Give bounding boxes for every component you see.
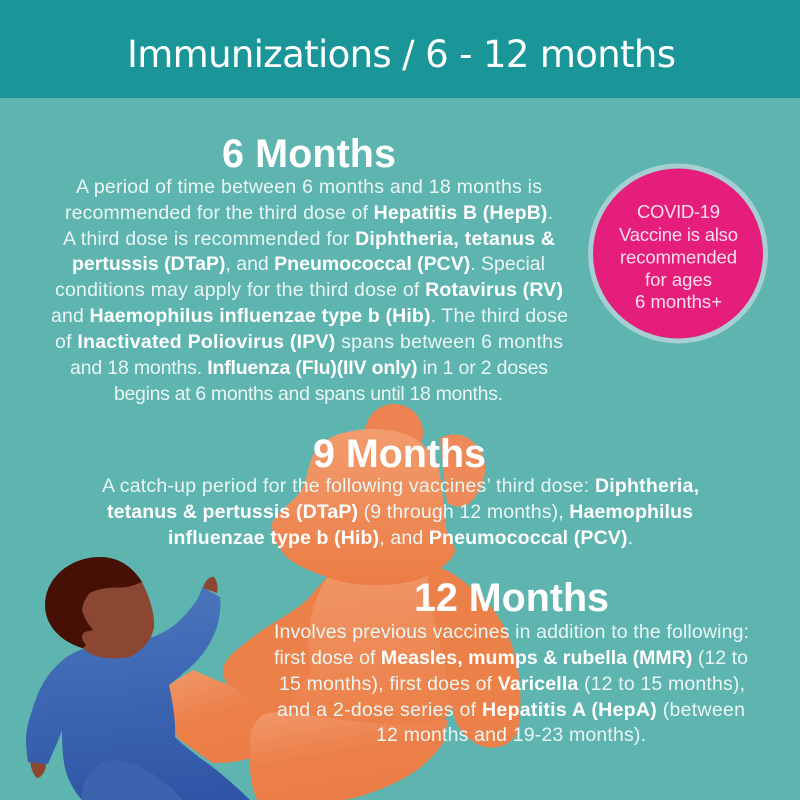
callout text — [619, 201, 738, 312]
body text: 9 months: influenzae type b (Hib), and Pneumococcal (PCV). — [168, 527, 633, 549]
callout disc — [593, 168, 763, 338]
callout ring — [588, 164, 768, 344]
heading: 12 Months: 12 Months — [414, 576, 609, 620]
bear torso highlight — [292, 570, 452, 724]
body text: 9 months: A catch-up period for the following vaccines’ third dose: Diphtheria, — [102, 475, 699, 497]
body text: 9 months — [102, 475, 699, 549]
bear right ear — [440, 434, 485, 507]
section: 12 months — [274, 576, 749, 746]
callout: COVID-19 — [588, 164, 768, 344]
illustration: teddy bear — [169, 404, 520, 800]
bear head — [272, 429, 455, 585]
body text: 12 months: Involves previous vaccines in addition to the following: — [274, 621, 749, 643]
body text: 6 months: conditions may apply for the third dose of Rotavirus (RV) — [55, 279, 563, 301]
body text: 12 months: 15 months), first does of Varicella (12 to 15 months), — [279, 673, 745, 695]
body text: 6 months: and Haemophilus influenzae type b (Hib). The third dose — [51, 305, 568, 327]
bear left ear — [365, 404, 423, 462]
body text: 6 months: A period of time between 6 months and 18 months is — [76, 176, 542, 198]
baby hair — [45, 557, 142, 649]
baby lower hand — [30, 761, 46, 778]
section: 9 months — [102, 432, 699, 549]
body text: 12 months: first dose of Measles, mumps & rubella (MMR) (12 to — [274, 647, 748, 669]
callout text: for ages — [645, 269, 712, 290]
body text: 12 months: and a 2-dose series of Hepatitis A (HepA) (between — [277, 699, 745, 721]
body text: 6 months: of Inactivated Poliovirus (IPV) spans between 6 months — [55, 331, 563, 353]
baby leg highlight — [82, 760, 182, 800]
bear back leg — [169, 670, 290, 763]
body text: 6 months: pertussis (DTaP), and Pneumococcal (PCV). Special — [72, 253, 545, 275]
bear front leg — [250, 713, 447, 800]
baby body — [26, 587, 250, 800]
bear right arm — [428, 567, 520, 748]
section: 6 months — [51, 132, 568, 405]
body text: 6 months: begins at 6 months and spans until 18 months. — [114, 383, 503, 405]
body text: 12 months: 12 months and 19-23 months). — [376, 724, 646, 746]
baby face — [82, 582, 154, 658]
header band — [0, 0, 800, 98]
heading: 6 Months: 6 Months — [222, 132, 396, 176]
baby raised hand — [203, 577, 218, 593]
callout text: COVID-19 — [637, 201, 720, 222]
heading: 9 Months: 9 Months — [313, 432, 486, 476]
body text: 6 months: recommended for the third dose of Hepatitis B (HepB). — [65, 202, 553, 224]
body text: 9 months: tetanus & pertussis (DTaP) (9 through 12 months), Haemophilus — [107, 501, 693, 523]
body text: 6 months — [51, 176, 568, 405]
bear body — [223, 570, 500, 740]
title: Immunizations / 6 - 12 months — [127, 33, 676, 76]
body text: 12 months — [274, 621, 749, 746]
illustration: baby — [26, 557, 250, 800]
callout text: Vaccine is also — [619, 224, 738, 245]
body text: 6 months: and 18 months. Influenza (Flu)(IIV only) in 1 or 2 doses — [70, 357, 548, 379]
callout text: 6 months+ — [635, 291, 722, 312]
body text: 6 months: A third dose is recommended for Diphtheria, tetanus & — [63, 228, 555, 250]
callout text: recommended — [620, 246, 737, 268]
